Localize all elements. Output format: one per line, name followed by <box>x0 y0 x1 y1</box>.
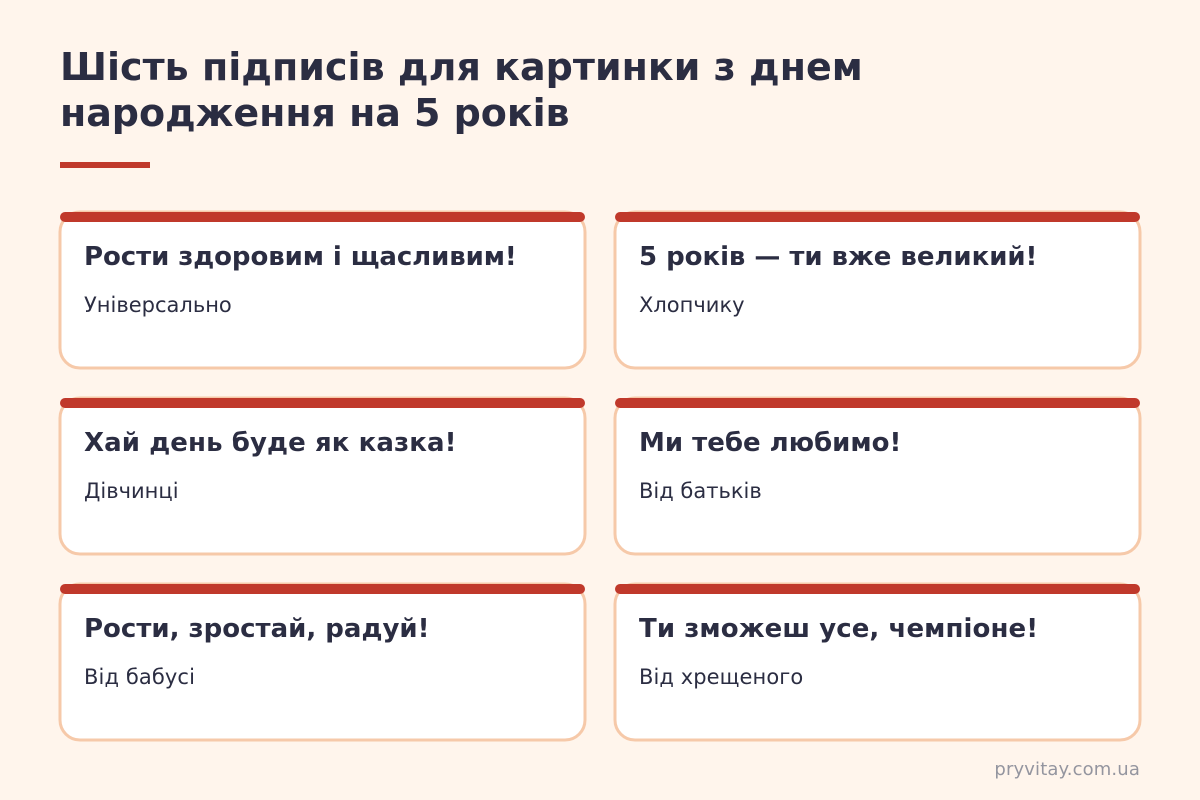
panel: card 1 <box>58 210 586 370</box>
panel: card 2: Хлопчику <box>639 293 745 317</box>
panel: card 6: Від хрещеного <box>639 665 803 689</box>
panel: card 4: Від батьків <box>639 479 762 503</box>
panel: card 3: Дівчинці <box>84 479 179 503</box>
panel: card 3 <box>58 396 586 556</box>
title <box>60 45 863 135</box>
panel: card 6 <box>614 582 1142 742</box>
panel: card 5 <box>58 582 586 742</box>
panel: card 2: 5 років — ти вже великий! <box>639 242 1037 272</box>
panel: card 1: Рости здоровим і щасливим! <box>84 242 517 272</box>
title: народження на 5 років <box>60 91 570 135</box>
panel: card 5: Від бабусі <box>84 665 195 689</box>
panel: card 2 <box>614 210 1142 370</box>
panel: card 6: Ти зможеш усе, чемпіоне! <box>639 614 1038 644</box>
panel: card 3: Хай день буде як казка! <box>84 428 457 458</box>
panel: card 4: Ми тебе любимо! <box>639 428 901 458</box>
footer source: pryvitay.com.ua <box>994 759 1140 780</box>
panel: card 4 <box>614 396 1142 556</box>
title underline accent <box>60 162 150 168</box>
panel: card 1: Універсально <box>84 293 232 317</box>
title: Шість підписів для картинки з днем <box>60 45 863 89</box>
panel: card 5: Рости, зростай, радуй! <box>84 614 429 644</box>
